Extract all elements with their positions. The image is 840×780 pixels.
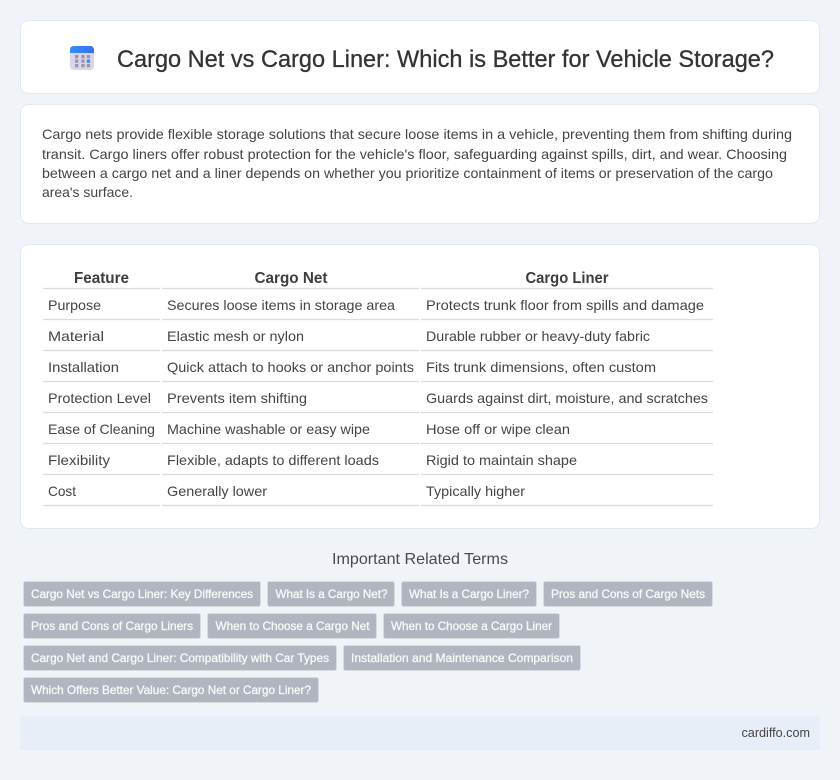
row: purpose: [48, 297, 704, 313]
table header row: Cargo Liner: [526, 270, 608, 287]
chip: [402, 582, 536, 606]
chip: [544, 582, 712, 606]
footer credit: cardiffo.com: [742, 726, 810, 740]
row: cost: Cost: [48, 483, 76, 499]
heading: related terms: Important Related Terms: [332, 551, 508, 568]
text block: introduction paragraph: area's surface.: [42, 184, 133, 200]
chip: [208, 614, 376, 638]
text block: introduction paragraph: [42, 126, 792, 200]
row: ease of cleaning: Ease of Cleaning: [48, 421, 155, 437]
row: flexibility: Flexibility: [48, 452, 110, 468]
row: installation: Installation: [48, 359, 119, 375]
row: flexibility: Rigid to maintain shape: [426, 452, 577, 468]
row: material: Material: [48, 328, 104, 344]
row: purpose: Secures loose items in storage area: [167, 297, 395, 313]
chip: [24, 646, 336, 670]
chip: [268, 582, 394, 606]
chip: When to Choose a Cargo Liner: [391, 619, 552, 633]
row: installation: Quick attach to hooks or anchor points: [167, 359, 414, 375]
chip: [24, 678, 318, 702]
row: purpose: Protects trunk floor from spills and damage: [426, 297, 704, 313]
text block: introduction paragraph: between a cargo net and a liner depends on whether you prioritize containment of items or preservation of the cargo: [42, 165, 773, 181]
footer: [20, 716, 820, 750]
chip: [384, 614, 560, 638]
row: flexibility: [48, 452, 577, 468]
row: material: [48, 328, 650, 344]
chip: Cargo Net and Cargo Liner: Compatibility with Car Types: [31, 651, 329, 665]
chip: Pros and Cons of Cargo Liners: [31, 619, 193, 633]
chip: What Is a Cargo Net?: [276, 587, 388, 601]
row: cost: [48, 483, 525, 499]
chip: [24, 614, 200, 638]
icon: calendar grid: [70, 46, 94, 70]
row: protection level: Guards against dirt, moisture, and scratches: [426, 390, 708, 406]
row: material: Elastic mesh or nylon: [167, 328, 304, 344]
row: ease of cleaning: Machine washable or easy wipe: [167, 421, 370, 437]
chip: What Is a Cargo Liner?: [409, 587, 529, 601]
text block: introduction paragraph: Cargo nets provide flexible storage solutions that secure loose items in a vehicle, preventing them from shifting during: [42, 126, 792, 142]
row: ease of cleaning: [48, 421, 570, 437]
row: cost: Typically higher: [426, 483, 525, 499]
row: protection level: [48, 390, 708, 406]
chip: [344, 646, 580, 670]
table header row: Cargo Net: [254, 270, 328, 287]
panel: comparison table: [20, 244, 820, 528]
row: flexibility: Flexible, adapts to different loads: [167, 452, 379, 468]
title: Cargo Net vs Cargo Liner: Which is Better for Vehicle Storage?: [117, 46, 774, 73]
row: ease of cleaning: Hose off or wipe clean: [426, 421, 570, 437]
row: cost: Generally lower: [167, 483, 267, 499]
row: protection level: Protection Level: [48, 390, 151, 406]
table header row: Feature: [74, 270, 129, 287]
chip: Which Offers Better Value: Cargo Net or Cargo Liner?: [31, 683, 311, 697]
chip: When to Choose a Cargo Net: [216, 619, 370, 633]
related term chips: [24, 582, 712, 702]
panel: introduction: [20, 104, 820, 224]
row: installation: Fits trunk dimensions, often custom: [426, 359, 656, 375]
row: installation: [48, 359, 656, 375]
table header row: [74, 270, 608, 287]
row: purpose: Purpose: [48, 297, 101, 313]
row: protection level: Prevents item shifting: [167, 390, 307, 406]
chip: Pros and Cons of Cargo Nets: [551, 587, 705, 601]
chip: Installation and Maintenance Comparison: [351, 651, 573, 665]
chip: [24, 582, 260, 606]
row: material: Durable rubber or heavy-duty fabric: [426, 328, 650, 344]
text block: introduction paragraph: transit. Cargo liners offer robust protection for the vehicle's floor, safeguarding against spills, dirt, and wear. Choosing: [42, 146, 787, 162]
chip: Cargo Net vs Cargo Liner: Key Differences: [31, 587, 253, 601]
panel: header: [20, 20, 820, 94]
